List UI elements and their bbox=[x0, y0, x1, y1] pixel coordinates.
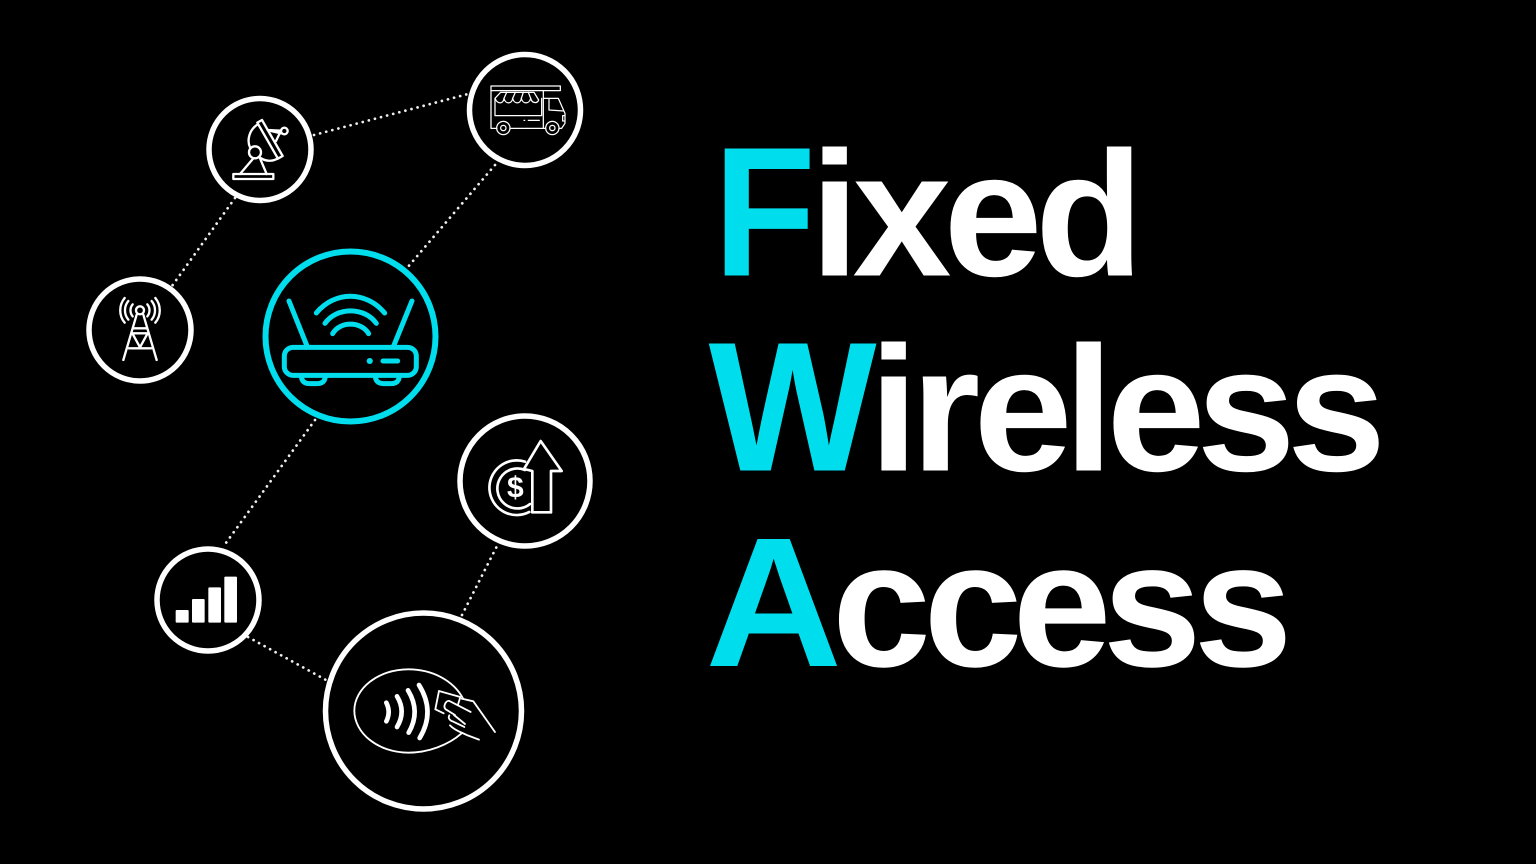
node: revenue growth bbox=[460, 416, 590, 546]
node: router bbox=[266, 252, 436, 422]
title line: Access: A bbox=[705, 499, 842, 705]
icon: cell tower bbox=[120, 298, 160, 360]
dollar sign: $ bbox=[507, 472, 524, 505]
icon: satellite dish bbox=[233, 120, 288, 179]
node: satellite dish bbox=[209, 98, 311, 200]
node: contactless payment bbox=[326, 613, 522, 809]
title line: Wireless: W bbox=[709, 305, 877, 510]
icon: signal bars bbox=[176, 577, 237, 623]
dotted connectors bbox=[172, 94, 497, 680]
title line: Wireless: ireless bbox=[869, 310, 1386, 508]
icon: food truck bbox=[491, 86, 565, 135]
title line: Fixed: ixed bbox=[810, 114, 1144, 314]
icon: contactless payment bbox=[354, 669, 495, 753]
title: Fixed Wireless Access bbox=[705, 110, 1386, 705]
title line: Fixed: F bbox=[714, 110, 816, 315]
node: cell tower bbox=[89, 279, 191, 381]
node: signal bars bbox=[157, 549, 259, 651]
icon: router bbox=[284, 296, 416, 384]
title line: Access: ccess bbox=[832, 505, 1293, 704]
node: food truck bbox=[470, 54, 580, 166]
